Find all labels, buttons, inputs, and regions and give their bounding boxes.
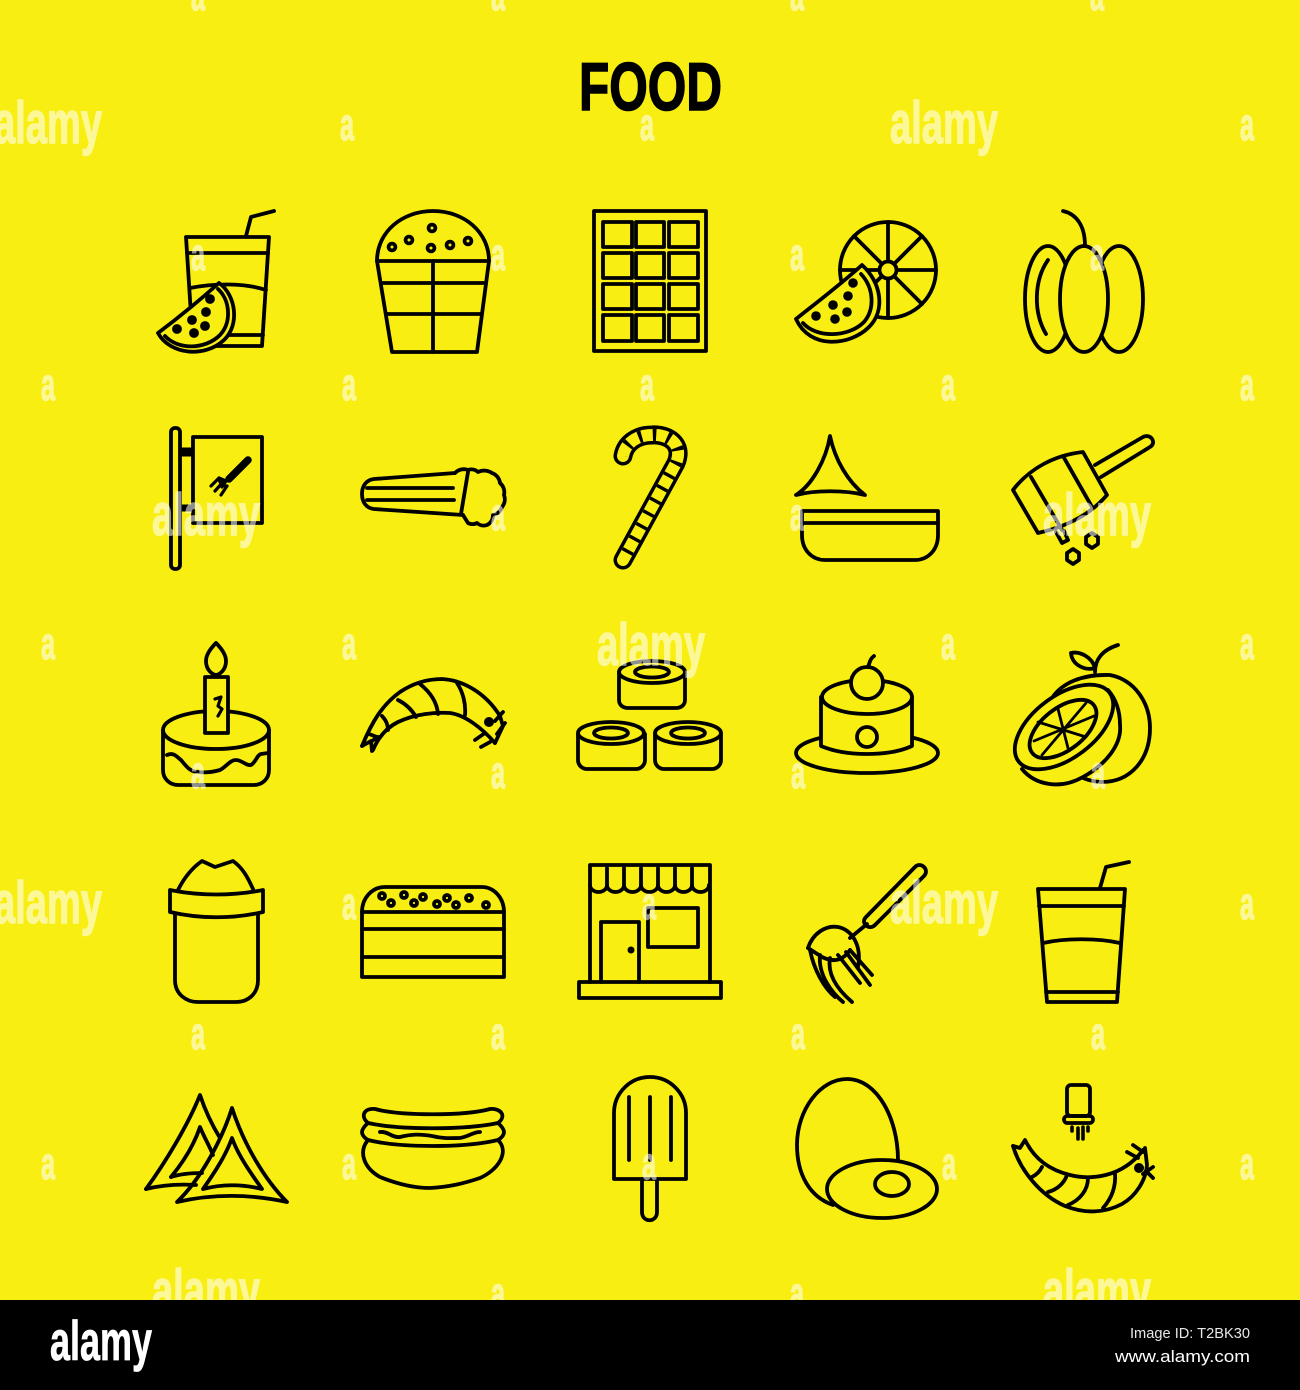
website: www.alamy.com [1114, 1347, 1250, 1366]
watermarks: a [1091, 1008, 1106, 1059]
watermarks: a [1240, 1138, 1255, 1189]
watermarks: alamy [597, 612, 705, 678]
watermarks: a [191, 1008, 206, 1059]
watermarks: a [791, 747, 806, 798]
icon: sushi rolls [578, 661, 721, 769]
watermarks: a [640, 99, 655, 150]
watermarks: alamy [890, 90, 998, 156]
watermarks: alamy [1043, 1258, 1151, 1324]
watermarks: alamy [152, 1258, 260, 1324]
watermarks: a [941, 359, 956, 410]
icon: drink cup with straw [1038, 862, 1129, 1002]
watermarks: a [1240, 878, 1255, 929]
title: FOOD [579, 49, 722, 125]
icon: pumpkin [1025, 211, 1143, 352]
watermarks: alamy [1043, 482, 1151, 548]
icon: hot dog [362, 1109, 504, 1188]
icon: egg and fried egg [797, 1079, 937, 1218]
icon: samosa and bowl [796, 436, 938, 560]
watermarks: a [340, 99, 355, 150]
icon: waffle [594, 211, 706, 351]
watermarks: a [41, 618, 56, 669]
footer bar [0, 1300, 1300, 1390]
icon: candy cane [623, 435, 678, 560]
watermarks: a [1240, 99, 1255, 150]
watermarks: a [491, 489, 506, 540]
watermarks: a [41, 1138, 56, 1189]
watermarks: a [491, 1008, 506, 1059]
watermarks: a [1091, 747, 1106, 798]
icon: shrimp [362, 679, 505, 751]
watermarks: alamy [890, 870, 998, 936]
icon: cake with cherry on plate [796, 656, 938, 773]
watermarks: a [491, 229, 506, 280]
watermarks: a [342, 359, 357, 410]
watermarks: a [342, 1138, 357, 1189]
watermarks: a [41, 359, 56, 410]
icon: samosas [146, 1095, 287, 1202]
footer logo: alamy [50, 1309, 152, 1372]
watermarks: a [1090, 229, 1105, 280]
icon: layered cake slice [362, 887, 504, 977]
watermarks: a [191, 747, 206, 798]
watermarks: a [642, 1138, 657, 1189]
icon: citrus wheel with melon slice [796, 222, 936, 342]
icon: halved orange with leaf [1000, 645, 1150, 786]
watermarks: a [491, 1268, 506, 1319]
watermarks: a [790, 489, 805, 540]
watermarks: a [191, 229, 206, 280]
watermarks: a [791, 1008, 806, 1059]
icon: shrimp with salt shaker [1013, 1085, 1153, 1211]
icon: food shop [579, 865, 721, 998]
icon: honey dipper [1013, 436, 1153, 564]
watermarks: a [790, 229, 805, 280]
watermarks: a [1240, 618, 1255, 669]
watermarks: a [640, 359, 655, 410]
watermarks: a [642, 878, 657, 929]
icon: muffin [377, 211, 489, 352]
watermarks: a [942, 1138, 957, 1189]
watermarks: a [491, 747, 506, 798]
icon: fork with noodles [808, 865, 926, 1002]
icon: ice lolly [614, 1077, 686, 1220]
watermarks: a [941, 618, 956, 669]
image id: Image ID: T2BK30 [1130, 1325, 1250, 1342]
watermarks: a [790, 1268, 805, 1319]
icon: birthday cake with candle [163, 643, 269, 785]
icon: jar with bulging top [170, 861, 263, 1002]
watermarks: a [342, 878, 357, 929]
icon: restaurant sign [171, 428, 262, 569]
watermarks: a [1240, 359, 1255, 410]
icon: drink with watermelon slice [158, 211, 274, 352]
watermarks: alamy [152, 482, 260, 548]
icon: ice cream cone [362, 469, 505, 526]
watermarks: a [342, 618, 357, 669]
